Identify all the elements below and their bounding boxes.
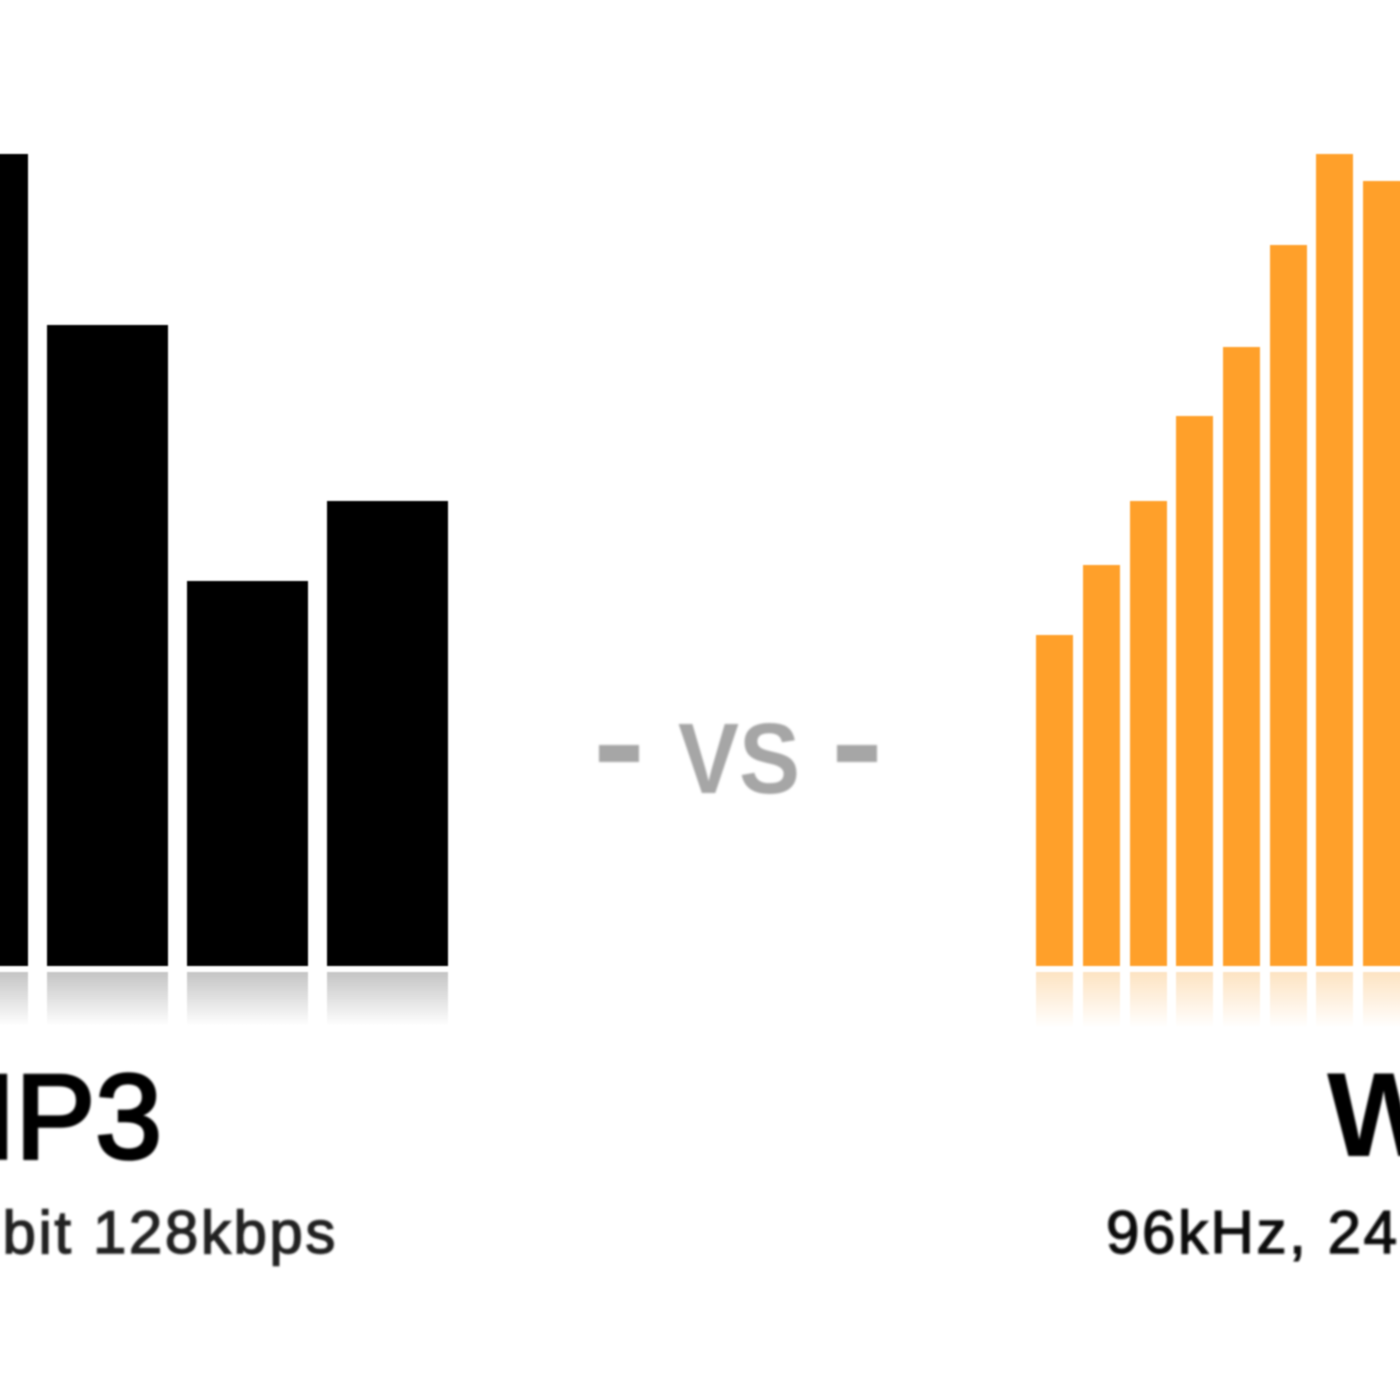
WAV bar chart xyxy=(1036,154,1400,1028)
MP3 bar chart xyxy=(0,154,448,1026)
vs label xyxy=(599,703,877,815)
vs label: VS xyxy=(678,703,800,815)
